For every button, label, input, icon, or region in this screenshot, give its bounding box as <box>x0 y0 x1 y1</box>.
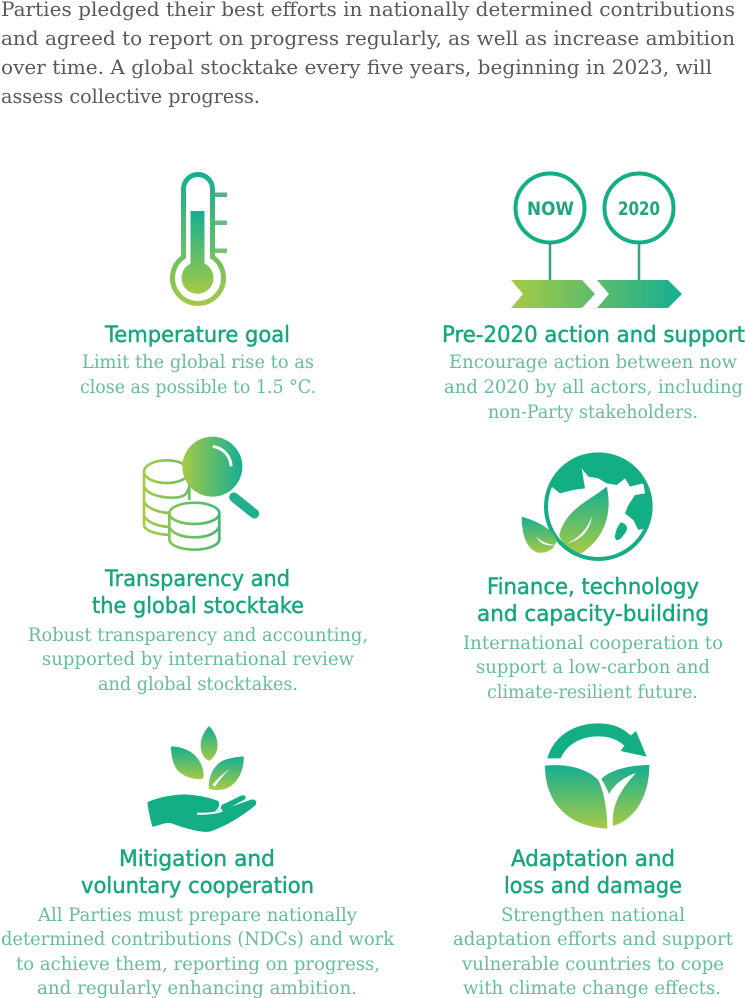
text: finance description <box>463 633 723 703</box>
panel: pre-2020 action <box>442 174 745 423</box>
icon: globe with leaves <box>522 452 653 561</box>
text: mitigation description: All Parties must prepare nationally <box>37 905 358 926</box>
text: mitigation description <box>1 905 395 998</box>
icon: timeline now to 2020: 2020 <box>618 198 660 220</box>
heading: adaptation and loss and damage: loss and damage <box>504 874 682 899</box>
icon: hand with leaves <box>147 726 256 832</box>
heading: temperature goal: Temperature goal <box>104 323 290 348</box>
icon: thermometer <box>173 174 227 303</box>
text: temperature goal description: Limit the global rise to as <box>82 352 314 373</box>
heading: finance, technology and capacity-building: Finance, technology <box>487 575 699 600</box>
text: transparency description: Robust transparency and accounting, <box>28 625 368 646</box>
heading: transparency and the global stocktake <box>92 567 304 619</box>
intro paragraph: over time. A global stocktake every five years, beginning in 2023, will <box>1 55 712 79</box>
heading: finance, technology and capacity-building: and capacity-building <box>477 602 709 627</box>
panel: temperature goal <box>80 174 316 398</box>
heading: adaptation and loss and damage: Adaptation and <box>511 847 675 872</box>
icon: coin stacks and magnifier <box>144 437 254 550</box>
icon: circular arrow and leaves <box>545 723 649 829</box>
text: adaptation description <box>453 905 734 998</box>
text: pre-2020 description <box>444 352 743 423</box>
panel: finance <box>463 445 723 703</box>
text: temperature goal description <box>80 352 316 398</box>
heading: transparency and the global stocktake: Transparency and <box>104 567 290 592</box>
intro paragraph: assess collective progress. <box>1 84 260 108</box>
panel: transparency <box>28 437 368 695</box>
text: pre-2020 description: Encourage action between now <box>449 352 737 373</box>
text: adaptation description: Strengthen national <box>501 905 685 926</box>
panel: mitigation <box>1 726 395 998</box>
text: mitigation description: to achieve them, reporting on progress, <box>16 954 380 975</box>
panel: adaptation <box>453 723 734 998</box>
intro paragraph: and agreed to report on progress regularly, as well as increase ambition <box>1 26 735 50</box>
heading: adaptation and loss and damage <box>504 847 682 899</box>
text: pre-2020 description: and 2020 by all actors, including <box>444 377 743 398</box>
text: mitigation description: determined contributions (NDCs) and work <box>1 929 395 950</box>
text: transparency description: and global stocktakes. <box>98 674 298 695</box>
icon: timeline now to 2020: NOW <box>527 198 574 220</box>
text: finance description: climate-resilient future. <box>487 682 698 703</box>
heading: mitigation and voluntary cooperation: Mitigation and <box>119 847 275 872</box>
heading: mitigation and voluntary cooperation <box>81 847 314 899</box>
heading: transparency and the global stocktake: the global stocktake <box>92 594 304 619</box>
text: transparency description: supported by international review <box>42 649 354 670</box>
text: transparency description <box>28 625 368 695</box>
intro paragraph <box>1 0 735 108</box>
text: finance description: International cooperation to <box>463 633 723 654</box>
text: temperature goal description: close as possible to 1.5 °C. <box>80 377 316 398</box>
icon: timeline now to 2020 <box>511 174 682 308</box>
heading: finance, technology and capacity-building <box>477 575 709 627</box>
heading: mitigation and voluntary cooperation: voluntary cooperation <box>81 874 314 899</box>
text: finance description: support a low-carbon and <box>476 657 710 678</box>
text: pre-2020 description: non-Party stakeholders. <box>488 402 698 423</box>
text: adaptation description: adaptation efforts and support <box>453 929 734 950</box>
text: adaptation description: vulnerable countries to cope <box>461 954 724 975</box>
